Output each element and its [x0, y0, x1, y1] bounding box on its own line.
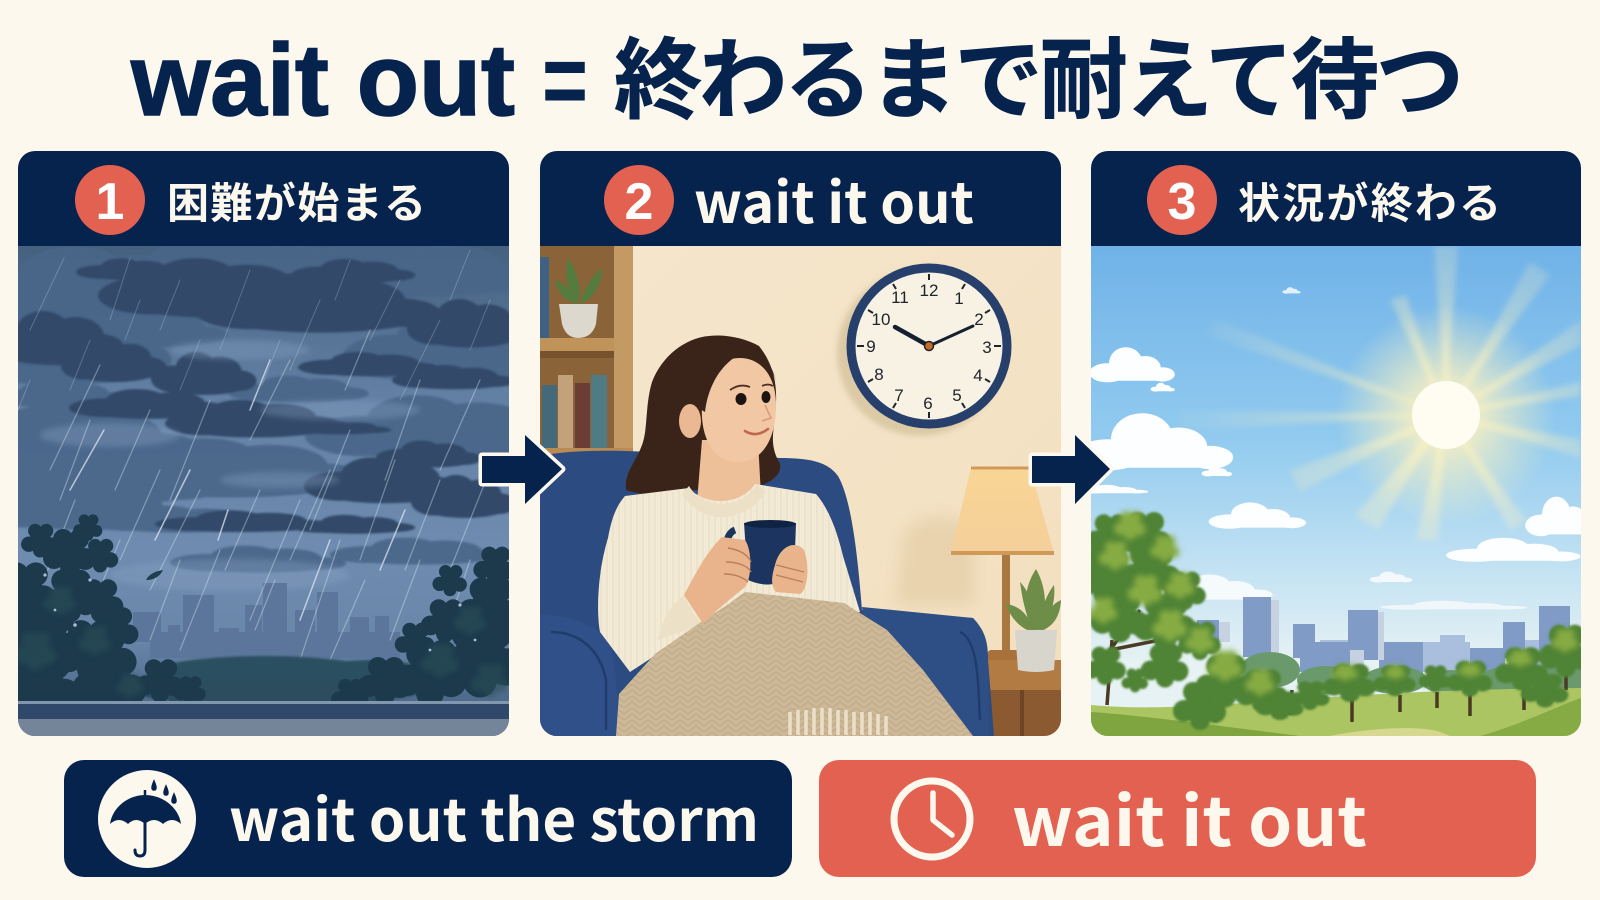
callout: wait it out [819, 760, 1536, 877]
illustration: trees [0, 514, 524, 725]
illustration: lamp [895, 468, 1054, 668]
icon: wall clock [837, 268, 1007, 436]
icon: wall clock: 12 [920, 281, 938, 300]
illustration: stormy sky [18, 246, 509, 736]
mug [726, 520, 796, 585]
illustration: park trees [1073, 511, 1592, 730]
distant tree line [1240, 652, 1590, 694]
number badge 2: 2 [625, 173, 653, 231]
icon: wall clock: 2 [974, 310, 984, 329]
title: = [542, 23, 588, 137]
illustration: woman with mug [598, 335, 973, 736]
number badge 1: 1 [96, 173, 124, 231]
label: wait out the storm: wait out the storm [229, 774, 759, 858]
icon: wall clock: 7 [894, 386, 904, 405]
illustration: sunny city [1197, 597, 1590, 694]
icon: wall clock: 4 [973, 366, 983, 385]
hand right [772, 545, 807, 594]
arrow: step 1 to step 2 [482, 435, 562, 504]
arrow: step 2 to step 3 [1032, 435, 1110, 504]
icon: umbrella [98, 770, 196, 868]
illustration: armchair [540, 451, 994, 736]
face [702, 358, 776, 462]
icon: wall clock: 9 [866, 337, 876, 356]
hand left [684, 537, 750, 624]
blanket fringe [790, 708, 886, 735]
panel: step 2 waiting [540, 151, 1061, 736]
icon: wall clock: 8 [874, 365, 884, 384]
illustration: side table and plant [988, 569, 1061, 736]
blanket [616, 592, 973, 736]
panel: step 3 clear sky [1073, 151, 1598, 736]
header band [540, 151, 1061, 246]
illustration: rain [18, 250, 490, 660]
icon: wall clock: 5 [952, 386, 962, 405]
icon: wall clock: 6 [923, 394, 933, 413]
heading: step 2: wait it out [694, 159, 974, 240]
sleeve cuff [658, 595, 703, 640]
number badge 1 [75, 165, 145, 235]
illustration: sun and rays [1180, 246, 1581, 540]
title: wait out [130, 23, 515, 137]
number badge 3: 3 [1168, 173, 1196, 231]
icon: wall clock: 11 [891, 288, 909, 307]
sweater [598, 484, 860, 672]
number badge 2 [604, 165, 674, 235]
number badge 3 [1147, 165, 1217, 235]
header band [1091, 151, 1581, 246]
heading: step 1: 困難が始まる [167, 170, 426, 231]
illustration: room wall [633, 246, 1061, 736]
icon: wall clock: 10 [872, 310, 890, 329]
title: 終わるまで耐えて待つ [614, 10, 1464, 137]
illustration: white clouds [1075, 287, 1598, 610]
illustration: blue sky [1091, 246, 1581, 736]
illustration: bookcase [540, 246, 633, 458]
icon: wall clock: 3 [982, 338, 992, 357]
illustration: park ground [1091, 688, 1581, 736]
icon: wall clock: 1 [954, 289, 964, 308]
label: wait it out: wait it out [1012, 767, 1367, 866]
icon: clock [894, 781, 970, 857]
neck [698, 440, 760, 501]
illustration: window ledge [18, 701, 509, 736]
heading: step 3: 状況が終わる [1238, 170, 1501, 231]
callout: wait out the storm [64, 760, 792, 877]
hair back [626, 335, 780, 495]
panel: step 1 storm [18, 151, 509, 736]
header band [18, 151, 509, 246]
title [130, 10, 1464, 137]
illustration: distant city [133, 583, 400, 658]
